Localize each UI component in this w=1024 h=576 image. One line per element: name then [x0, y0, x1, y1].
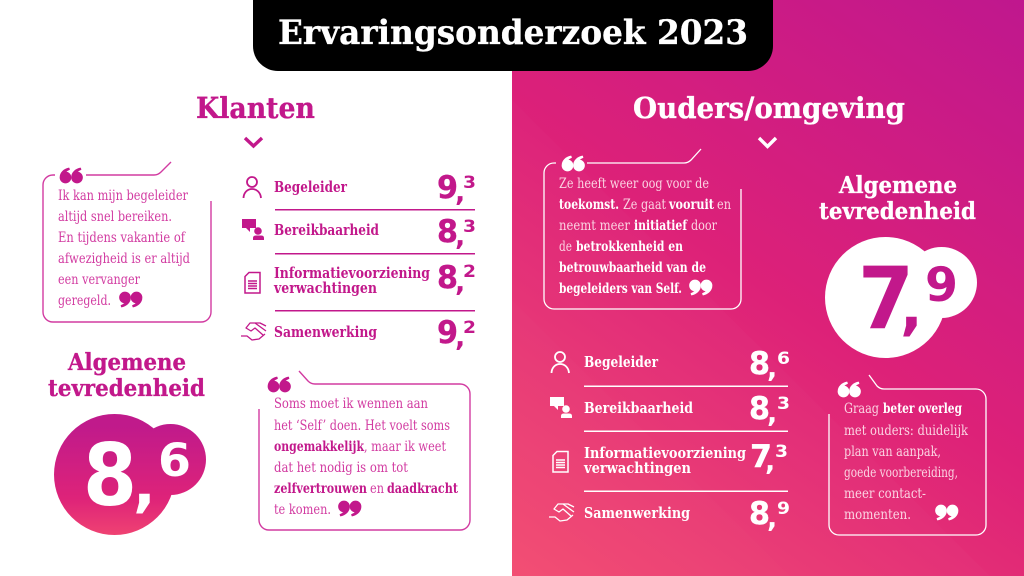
- row: begeleider: ,: [455, 177, 465, 208]
- panel: ouders background: [512, 0, 1024, 576]
- callout: ouders quote 1: toekomst.: [559, 197, 619, 213]
- row: bereikbaarheid ouders: ,: [767, 398, 777, 429]
- row: informatievoorziening: [245, 260, 476, 298]
- row: informatievoorziening ouders: Informatievoorziening: [584, 444, 746, 462]
- callout: klanten quote 2: , maar ik weet: [364, 439, 446, 455]
- callout: ouders quote 1: Ze gaat: [623, 197, 666, 213]
- title: Ervaringsonderzoek 2023: [278, 13, 748, 53]
- callout: klanten quote 2: zelfvertrouwen: [274, 481, 367, 497]
- callout: ouders quote 2: plan van aanpak,: [844, 444, 941, 460]
- callout: klanten quote 1: Ik kan mijn begeleider: [58, 188, 188, 204]
- heading: algemene tevredenheid klanten: [48, 349, 205, 402]
- callout: klanten quote 1: geregeld.: [58, 293, 111, 309]
- row: samenwerking: Samenwerking: [274, 323, 377, 341]
- panel: klanten: [43, 91, 476, 535]
- callout: ouders quote 2: momenten.: [844, 507, 911, 523]
- callout: ouders quote 2: met ouders: duidelijk: [844, 423, 969, 439]
- score badge: ouders 7,9: ,: [900, 273, 923, 343]
- score badge: klanten 8,6: ,: [133, 450, 156, 520]
- row: bereikbaarheid ouders: [550, 391, 790, 429]
- callout: klanten quote 1: afwezigheid is er altijd: [58, 251, 190, 267]
- callout: ouders quote 1: initiatief: [634, 218, 688, 234]
- heading: algemene tevredenheid ouders: [819, 172, 976, 225]
- callout: ouders quote 1: begeleiders van Self.: [559, 281, 682, 297]
- callout: ouders quote 2: goede voorbereiding,: [844, 465, 958, 481]
- row: informatievoorziening: ,: [455, 267, 465, 298]
- row: samenwerking ouders: 9: [777, 499, 790, 518]
- row: samenwerking: 9: [437, 315, 458, 351]
- row: bereikbaarheid: [242, 214, 476, 252]
- row: informatievoorziening: verwachtingen: [273, 279, 377, 297]
- heading: algemene tevredenheid klanten: tevredenheid: [48, 375, 205, 402]
- row: bereikbaarheid: ,: [455, 221, 465, 252]
- callout: ouders quote 1: de: [559, 239, 572, 255]
- row: informatievoorziening ouders: ,: [765, 446, 775, 477]
- heading: algemene tevredenheid klanten: Algemene: [67, 349, 186, 376]
- row: begeleider: 9: [437, 170, 458, 206]
- row: begeleider ouders: Begeleider: [584, 353, 659, 371]
- row: bereikbaarheid: 3: [463, 217, 476, 236]
- callout: klanten quote 1: En tijdens vakantie of: [58, 230, 186, 246]
- callout: klanten quote 2: en: [370, 481, 384, 497]
- callout: ouders quote 2: Graag: [844, 401, 879, 417]
- callout: klanten quote 2: te komen.: [274, 502, 331, 518]
- score badge: klanten 8,6: 8: [83, 426, 137, 526]
- callout: klanten quote 2: ongemakkelijk: [274, 439, 365, 455]
- row: bereikbaarheid ouders: 8: [749, 391, 770, 427]
- score badge: ouders 7,9: 9: [925, 258, 958, 313]
- row: informatievoorziening: Informatievoorziening: [274, 264, 430, 282]
- callout: klanten quote 2: daadkracht: [387, 481, 459, 497]
- row: bereikbaarheid: Bereikbaarheid: [274, 221, 379, 239]
- heading: ouders/omgeving: Ouders/omgeving: [633, 91, 905, 125]
- callout: ouders quote 2: meer contact-: [844, 486, 926, 502]
- callout: ouders quote 1: neemt meer: [559, 218, 630, 234]
- score badge: ouders 7,9: [825, 237, 977, 358]
- row: informatievoorziening: 8: [437, 260, 458, 296]
- callout: ouders quote 1: vooruit: [668, 197, 715, 213]
- callout: klanten quote 1: een vervanger: [58, 272, 140, 288]
- callout: klanten quote 2: dat het nodig is om tot: [274, 460, 408, 476]
- callout: klanten quote 1: [43, 162, 211, 322]
- callout: klanten quote 2: het ‘Self’ doen. Het voelt soms: [274, 418, 450, 434]
- callout: ouders quote 1: betrouwbaarheid van de: [559, 260, 706, 276]
- row: samenwerking ouders: Samenwerking: [584, 504, 690, 522]
- callout: ouders quote 1: [544, 149, 741, 309]
- heading: klanten: Klanten: [196, 91, 315, 125]
- score badge: klanten 8,6: [54, 414, 206, 535]
- row: samenwerking ouders: 8: [749, 496, 770, 532]
- row: informatievoorziening ouders: 7: [750, 439, 772, 475]
- callout: ouders quote 2: [829, 375, 986, 535]
- row: samenwerking: 2: [463, 318, 476, 337]
- row: begeleider: [244, 170, 476, 208]
- row: informatievoorziening: 2: [463, 262, 476, 281]
- row: bereikbaarheid ouders: 3: [777, 394, 790, 413]
- row: begeleider: 3: [463, 173, 476, 192]
- row: informatievoorziening ouders: verwachtingen: [583, 459, 691, 477]
- row: informatievoorziening ouders: 3: [775, 442, 788, 461]
- row: begeleider ouders: [552, 346, 790, 384]
- callout: klanten quote 2: Soms moet ik wennen aan: [274, 396, 428, 412]
- callout: ouders quote 1: betrokkenheid en: [576, 239, 683, 255]
- row: informatievoorziening ouders: [553, 439, 788, 477]
- row: bereikbaarheid: 8: [437, 214, 458, 250]
- score badge: klanten 8,6: 6: [158, 434, 191, 487]
- row: bereikbaarheid ouders: Bereikbaarheid: [584, 399, 693, 417]
- callout: ouders quote 1: door: [691, 218, 717, 234]
- title: [253, 0, 773, 71]
- heading: algemene tevredenheid ouders: tevredenheid: [819, 198, 976, 225]
- row: samenwerking: [241, 315, 476, 353]
- row: begeleider ouders: 8: [749, 346, 770, 382]
- row: begeleider: Begeleider: [274, 178, 348, 196]
- heading: algemene tevredenheid ouders: Algemene: [838, 172, 957, 199]
- callout: ouders quote 2: beter overleg: [883, 401, 962, 417]
- row: samenwerking ouders: ,: [767, 503, 777, 534]
- row: begeleider ouders: ,: [767, 353, 777, 384]
- row: samenwerking ouders: [549, 496, 790, 534]
- icon: chevron klanten: [245, 138, 262, 146]
- callout: ouders quote 1: Ze heeft weer oog voor de: [559, 176, 709, 192]
- callout: klanten quote 1: altijd snel bereiken.: [58, 209, 172, 225]
- callout: ouders quote 1: en: [717, 197, 731, 213]
- callout: klanten quote 2: [259, 371, 470, 530]
- score badge: ouders 7,9: 7: [858, 249, 914, 349]
- panel: ouders/omgeving: [544, 91, 986, 535]
- icon: chevron ouders: [759, 138, 776, 146]
- row: begeleider ouders: 6: [777, 349, 790, 368]
- row: samenwerking: ,: [455, 322, 465, 353]
